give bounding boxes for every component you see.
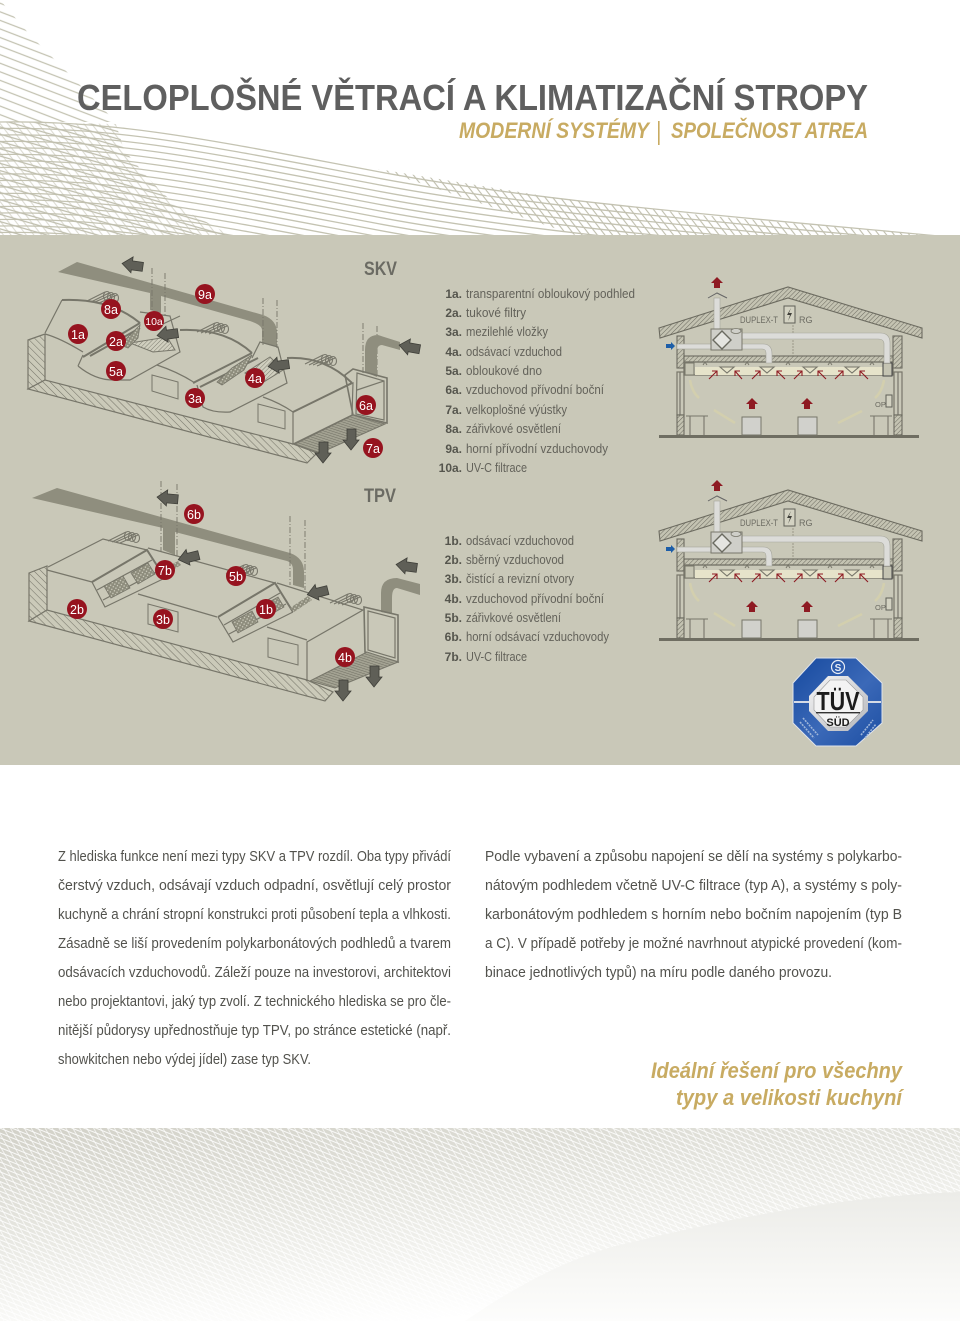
legend: TPV: čistící a revizní otvory — [466, 572, 575, 586]
text block: left column: kuchyně a chrání stropní konstrukci proti působení tepla a vlhkosti. — [58, 907, 451, 923]
number badges: 7b — [158, 564, 172, 578]
arrows — [121, 256, 421, 463]
legend: TPV: sběrný vzduchovod — [466, 553, 564, 567]
top wave line background — [0, 0, 960, 348]
legend: TPV: 2b. — [445, 553, 462, 567]
legend: SKV: 5a. — [445, 364, 462, 378]
subtitle — [459, 118, 868, 145]
number badges: 1b — [259, 603, 273, 617]
legend: SKV: horní přívodní vzduchovody — [466, 442, 609, 456]
legend: SKV: 7a. — [445, 403, 462, 417]
text block: left column: Zásadně se liší provedením polykarbonátových podhledů a tvarem — [58, 936, 451, 952]
diagram: building section SKV — [659, 277, 922, 438]
legend: SKV: mezilehlé vložky — [466, 325, 549, 339]
duct: side supply — [381, 578, 420, 614]
arrows — [156, 489, 418, 701]
number badges: 3a — [188, 392, 202, 406]
legend: TPV: 3b. — [445, 572, 462, 586]
icon: TÜV SÜD badge: S — [835, 663, 842, 674]
number badges: 5a — [109, 365, 123, 379]
number badges: 5b — [229, 570, 243, 584]
bottom mesh band background — [0, 1128, 960, 1321]
text block: right column: binace jednotlivých typů) na míru podle daného provozu. — [485, 965, 832, 981]
icon: TÜV SÜD badge: SÜD — [826, 716, 850, 729]
legend: SKV: vzduchovod přívodní boční — [466, 383, 604, 397]
number badges: 6a — [359, 399, 373, 413]
diagram: building section SKV: OP — [875, 400, 886, 409]
text block: right column: a C). V případě potřeby je možné navrhnout atypické provedení (kom- — [485, 936, 902, 952]
legend: SKV: 10a. — [439, 461, 462, 475]
number badges: 1a — [71, 328, 85, 342]
legend: TPV: UV-C filtrace — [466, 650, 527, 664]
text block: right column — [485, 849, 902, 981]
legend: SKV: UV-C filtrace — [466, 461, 527, 475]
legend: TPV — [445, 534, 610, 664]
duct: upper supply duct — [58, 262, 277, 347]
legend: SKV: 3a. — [445, 325, 462, 339]
callout: typy a velikosti kuchyní — [676, 1085, 905, 1110]
legend: SKV: odsávací vzduchod — [466, 345, 562, 359]
number badges: 2b — [70, 603, 84, 617]
text block: left column: čerstvý vzduch, odsávají vzduch odpadní, osvětlují celý prostor — [58, 878, 451, 894]
legend: TPV: horní odsávací vzduchovody — [466, 630, 610, 644]
diagram: building section SKV: RG — [799, 315, 812, 325]
legend: SKV: velkoplošné výústky — [466, 403, 568, 417]
number badges: 3b — [156, 613, 170, 627]
text block: right column: nátovým podhledem včetně UV-C filtrace (typ A), a systémy s poly- — [485, 878, 902, 894]
legend: SKV: tukové filtry — [466, 306, 527, 320]
number badges: 6b — [187, 508, 201, 522]
legend: TPV: 6b. — [445, 630, 462, 644]
legend: TPV: 1b. — [445, 534, 462, 548]
text block: left column: Z hlediska funkce není mezi typy SKV a TPV rozdíl. Oba typy přivádí — [58, 849, 451, 865]
heading: TPV: TPV — [364, 486, 396, 507]
duct: side supply — [365, 335, 400, 377]
number badges — [67, 284, 383, 667]
legend: SKV: 8a. — [445, 422, 462, 436]
legend: SKV: transparentní obloukový podhled — [466, 287, 635, 301]
diagram: building section TPV: RG — [799, 518, 812, 528]
subtitle: MODERNÍ SYSTÉMY — [459, 118, 651, 143]
diagram: building section SKV: DUPLEX-T — [740, 315, 778, 325]
title: CELOPLOŠNÉ VĚTRACÍ A KLIMATIZAČNÍ STROPY — [77, 76, 868, 118]
diagram: building section TPV: DUPLEX-T — [740, 518, 778, 528]
text block: right column: Podle vybavení a způsobu napojení se dělí na systémy s polykarbo- — [485, 849, 902, 865]
callout: Ideální řešení pro všechny — [651, 1058, 904, 1083]
text block: left column: nitější půdorysy upřednostňuje typ TPV, po stránce estetické (např. — [58, 1023, 451, 1039]
number badges: 7a — [366, 442, 380, 456]
duct: upper exhaust duct — [32, 488, 304, 588]
legend: TPV: vzduchovod přívodní boční — [466, 592, 604, 606]
outlet box — [364, 607, 398, 662]
callout — [651, 1058, 905, 1110]
number badges: 2a — [109, 335, 123, 349]
legend: TPV: 5b. — [445, 611, 462, 625]
legend: TPV: 4b. — [445, 592, 462, 606]
icon: TÜV SÜD badge: TÜV — [816, 686, 860, 716]
legend: SKV: 2a. — [445, 306, 462, 320]
icon: TÜV SÜD badge — [793, 658, 882, 746]
legend: SKV: zářivkové osvětlení — [466, 422, 561, 436]
text block: left column: showkitchen nebo výdej jídel) zase typ SKV. — [58, 1052, 311, 1068]
diagram: SKV isometric ceiling — [28, 256, 421, 463]
text block: right column: karbonátovým podhledem s horním nebo bočním napojením (typ B — [485, 907, 902, 923]
number badges: 8a — [104, 303, 118, 317]
legend: SKV: 4a. — [445, 345, 462, 359]
legend: SKV: 6a. — [445, 383, 462, 397]
subtitle: SPOLEČNOST ATREA — [671, 118, 868, 143]
floor grille — [310, 652, 398, 688]
outlet box — [345, 369, 387, 423]
legend: SKV: 9a. — [445, 442, 462, 456]
text block: left column: odsávacích vzduchovodů. Záleží pouze na investorovi, architektovi — [58, 965, 451, 981]
text block: left column — [58, 849, 451, 1068]
number badges: 9a — [198, 288, 212, 302]
number badges: 4b — [338, 651, 352, 665]
legend: SKV: obloukové dno — [466, 364, 542, 378]
legend: SKV: 1a. — [445, 287, 462, 301]
floor grille — [295, 415, 385, 453]
legend: TPV: zářivkové osvětlení — [466, 611, 561, 625]
panel: diagrams — [0, 235, 960, 765]
legend: TPV: odsávací vzduchovod — [466, 534, 574, 548]
legend: SKV — [439, 287, 635, 475]
legend: TPV: 7b. — [445, 650, 462, 664]
diagram: TPV isometric ceiling — [29, 481, 420, 701]
diagram: building section TPV — [659, 480, 922, 641]
diagram: building section TPV: OP — [875, 603, 886, 612]
text block: left column: nebo projektantovi, jaký typ zvolí. Z technického hlediska se pro čle- — [58, 994, 451, 1010]
number badges: 10a — [145, 316, 163, 328]
heading: SKV: SKV — [364, 259, 397, 280]
number badges: 4a — [248, 372, 262, 386]
